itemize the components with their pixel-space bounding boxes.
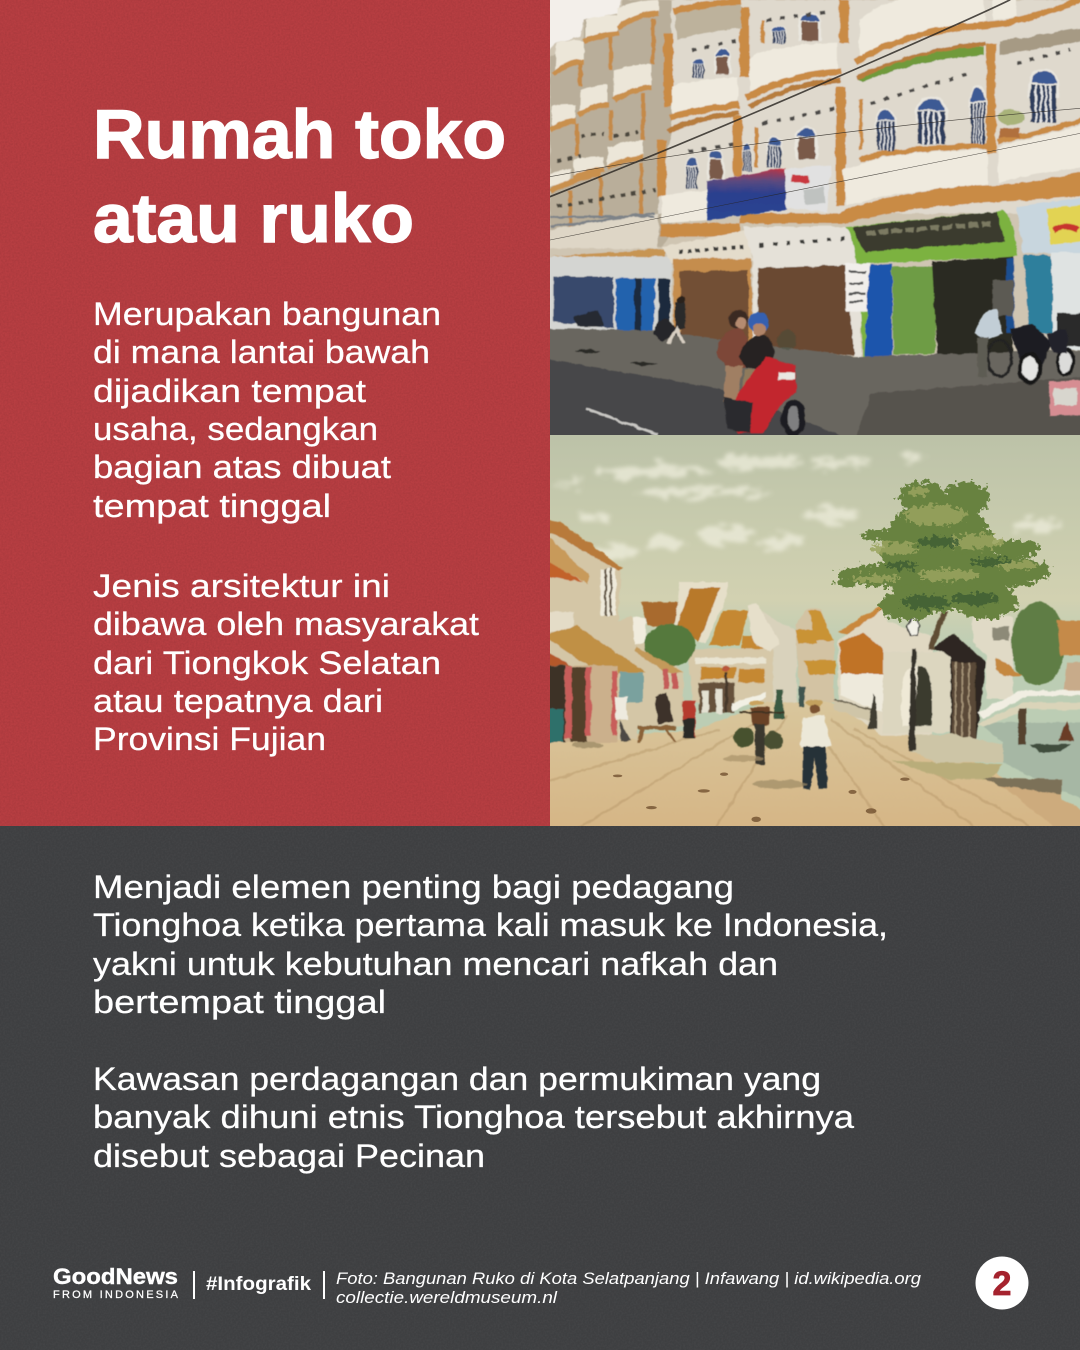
text block: definition: Merupakan bangunan — [93, 296, 441, 332]
water — [978, 722, 1080, 803]
panel: footer — [53, 1256, 1028, 1310]
green bush — [645, 624, 695, 667]
far houses — [753, 605, 797, 702]
photo: ruko building in Selatpanjang — [550, 0, 1080, 435]
left building — [543, 519, 684, 739]
text block: importance for traders: bertempat tinggal — [93, 984, 386, 1020]
standing man — [806, 700, 823, 706]
text block: origin — [93, 568, 479, 757]
panel: red text panel — [0, 0, 550, 826]
white tower — [973, 612, 1013, 699]
text block: importance for traders: Tionghoa ketika pertama kali masuk ke Indonesia, — [93, 907, 888, 943]
photo credits: collectie.wereldmuseum.nl — [336, 1289, 559, 1307]
plinth and lamp — [909, 734, 1003, 763]
logo: GoodNews from Indonesia — [53, 1264, 179, 1301]
text block: importance for traders: yakni untuk kebutuhan mencari nafkah dan — [93, 946, 778, 982]
cables — [550, 0, 1080, 240]
gate — [883, 652, 952, 733]
text block: Pecinan: disebut sebagai Pecinan — [93, 1138, 485, 1174]
text block: origin: Jenis arsitektur ini — [93, 568, 390, 604]
photo credits — [336, 1270, 922, 1307]
hashtag: #Infografik — [206, 1274, 311, 1295]
left receding facade — [550, 0, 672, 247]
shops — [543, 257, 672, 333]
tree far — [1011, 602, 1065, 686]
text block: importance for traders: Menjadi elemen penting bagi pedagang — [93, 869, 734, 905]
text block: Pecinan: banyak dihuni etnis Tionghoa tersebut akhirnya — [93, 1099, 854, 1135]
text block: definition: di mana lantai bawah — [93, 334, 430, 370]
text block: origin: Provinsi Fujian — [93, 721, 326, 757]
photo credits: Foto: Bangunan Ruko di Kota Selatpanjang | Infawang | id.wikipedia.org — [336, 1270, 922, 1288]
text block: definition — [93, 296, 441, 524]
riders on red motorbike — [707, 165, 1080, 437]
bridge — [978, 691, 1080, 719]
ground — [543, 328, 1080, 442]
fences — [834, 699, 871, 709]
plant — [1000, 128, 1020, 138]
text block: definition: bagian atas dibuat — [93, 449, 391, 485]
page number badge — [976, 1256, 1028, 1310]
windows — [1028, 68, 1059, 122]
text block: definition: dijadikan tempat — [93, 373, 366, 409]
text block: origin: atau tepatnya dari — [93, 683, 383, 719]
page number badge: 2 — [993, 1265, 1011, 1303]
people — [868, 694, 877, 729]
lower balconies — [662, 123, 1080, 223]
text block: Pecinan: Kawasan perdagangan dan permukiman yang — [93, 1061, 821, 1097]
title: Rumah toko — [93, 96, 506, 173]
text block: importance for traders — [93, 869, 888, 1020]
orange columns — [662, 0, 991, 207]
parked motorbikes left — [574, 310, 604, 327]
table — [637, 726, 677, 742]
text block: origin: dibawa oleh masyarakat — [93, 606, 479, 642]
shop fronts — [543, 666, 618, 742]
right white wall & houses — [837, 605, 932, 736]
ground — [543, 702, 1080, 833]
main tree — [834, 482, 1050, 620]
foreground figures — [722, 700, 831, 789]
panel: dark text panel — [0, 826, 1080, 1350]
logo: GoodNews from Indonesia: GoodNews — [53, 1264, 178, 1289]
main facade — [658, 0, 1080, 213]
title — [93, 96, 506, 257]
porter — [751, 707, 770, 726]
ventilation blocks — [689, 12, 1071, 152]
man with bicycle and motorbike — [974, 308, 1003, 338]
logo: GoodNews from Indonesia: FROM INDONESIA — [53, 1289, 179, 1301]
text block: definition: usaha, sedangkan — [93, 411, 378, 447]
banner — [707, 168, 787, 221]
illustration: historic Chinese quarter street — [550, 435, 1080, 826]
text block: definition: tempat tinggal — [93, 488, 331, 524]
awnings — [543, 625, 646, 674]
title: atau ruko — [93, 180, 414, 257]
balconies — [675, 3, 741, 40]
text block: origin: dari Tiongkok Selatan — [93, 645, 441, 681]
text block: Pecinan — [93, 1061, 854, 1174]
